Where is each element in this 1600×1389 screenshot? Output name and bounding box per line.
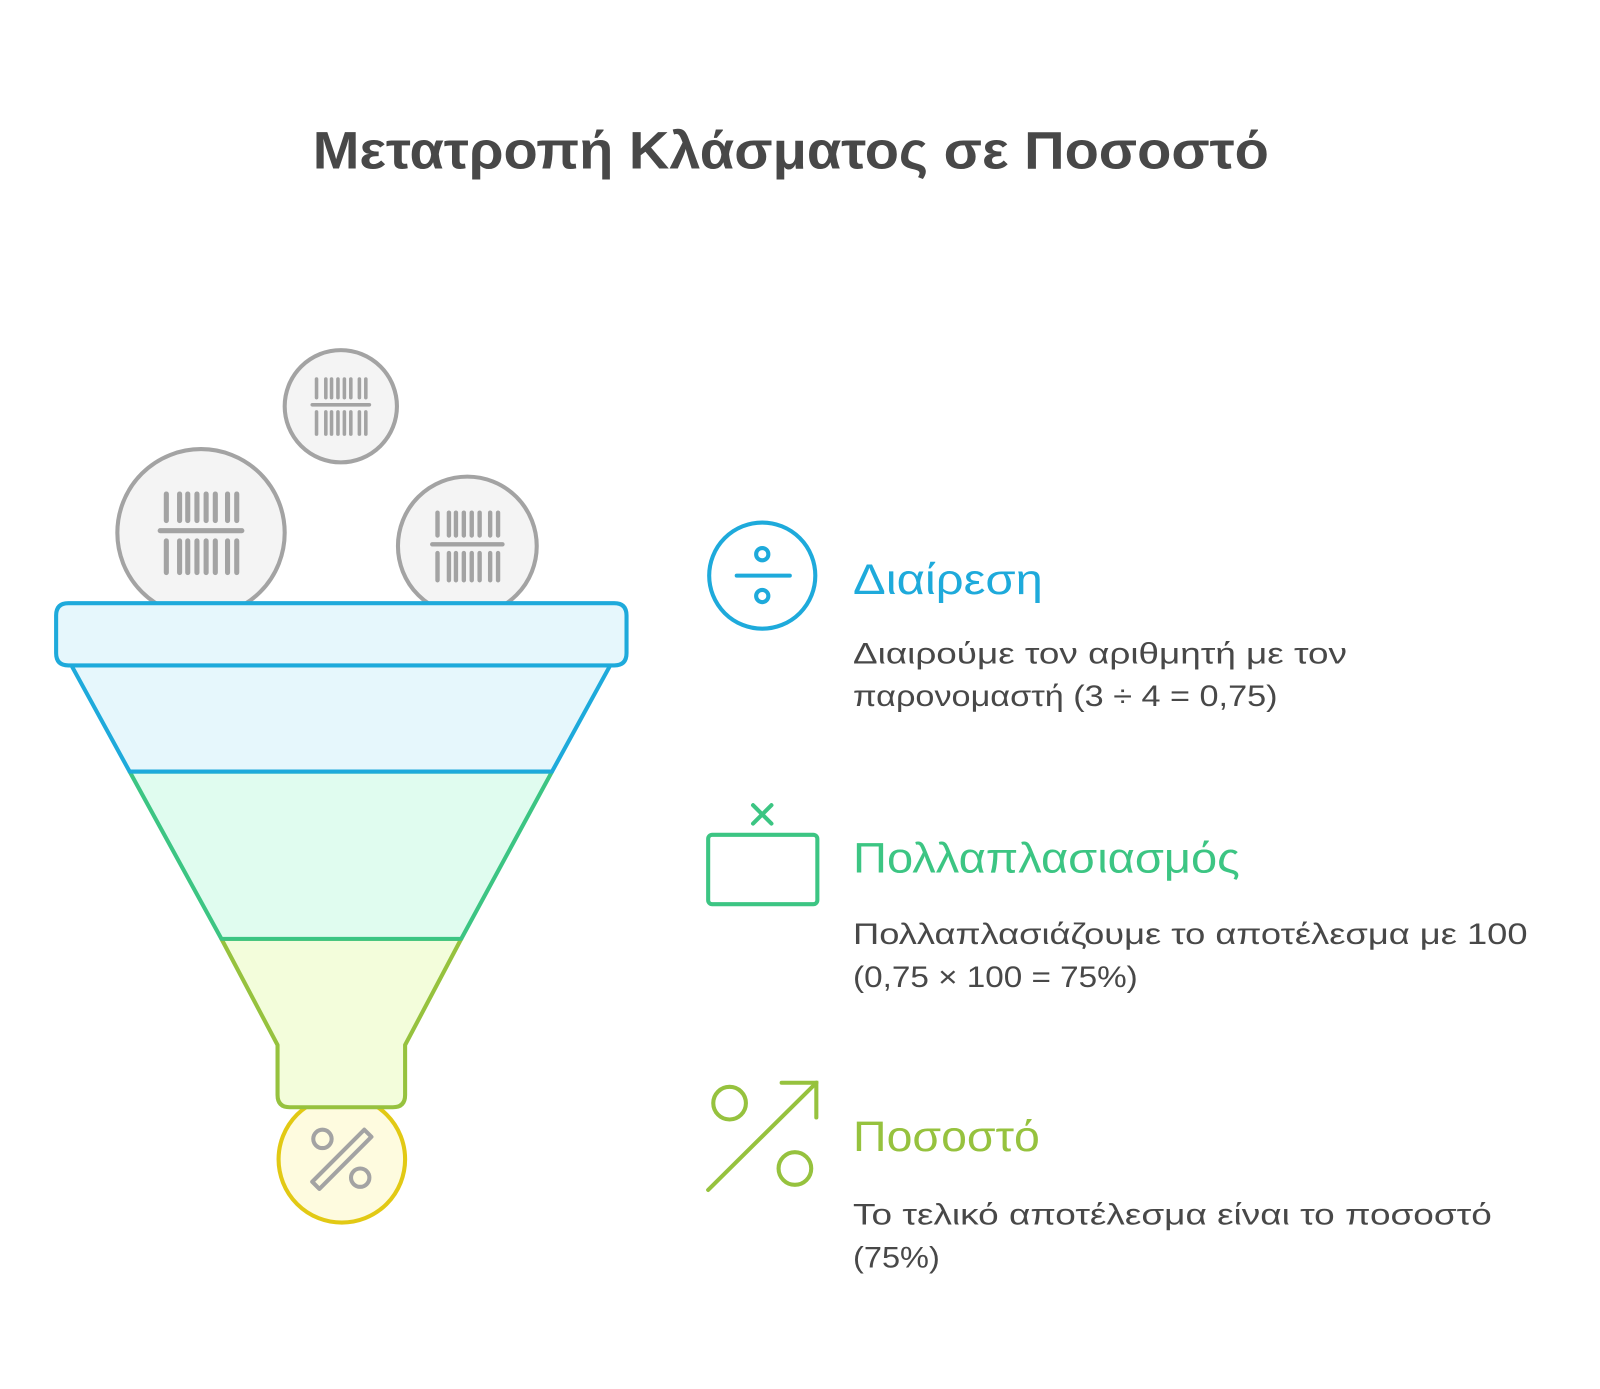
icon: multiplication box bbox=[708, 805, 817, 904]
description: (75%) bbox=[853, 1241, 940, 1274]
heading: Ποσοστό: Ποσοστό bbox=[853, 1113, 1040, 1161]
funnel section: green middle bbox=[130, 772, 552, 939]
description: παρονομαστή (3 ÷ 4 = 0,75) bbox=[853, 680, 1278, 713]
title: Μετατροπή Κλάσματος σε Ποσοστό bbox=[313, 121, 1269, 180]
description: Διαιρούμε τον αριθμητή με τον bbox=[853, 637, 1347, 670]
icon: percent coin bbox=[279, 1096, 405, 1223]
icon: small fraction coin bbox=[285, 350, 397, 462]
funnel bbox=[56, 603, 627, 1107]
description: (0,75 × 100 = 75%) bbox=[853, 961, 1138, 994]
icon: division bbox=[709, 523, 815, 629]
funnel section: blue top bbox=[71, 665, 610, 772]
step 3: percentage bbox=[708, 1083, 1492, 1274]
description: Το τελικό αποτέλεσμα είναι το ποσοστό bbox=[853, 1199, 1492, 1232]
funnel section: yellow-green bottom bbox=[221, 939, 461, 1107]
heading: Πολλαπλασιασμός: Πολλαπλασιασμός bbox=[853, 835, 1240, 883]
step 1: division bbox=[709, 523, 1347, 713]
heading: Διαίρεση: Διαίρεση bbox=[853, 556, 1043, 604]
icon: right fraction coin bbox=[398, 477, 537, 615]
icon: percent arrow bbox=[708, 1083, 816, 1190]
icon: large fraction coin bbox=[117, 449, 285, 616]
step 2: multiplication bbox=[708, 805, 1528, 994]
description: Πολλαπλασιάζουμε το αποτέλεσμα με 100 bbox=[853, 918, 1528, 951]
funnel rim bbox=[56, 603, 627, 665]
